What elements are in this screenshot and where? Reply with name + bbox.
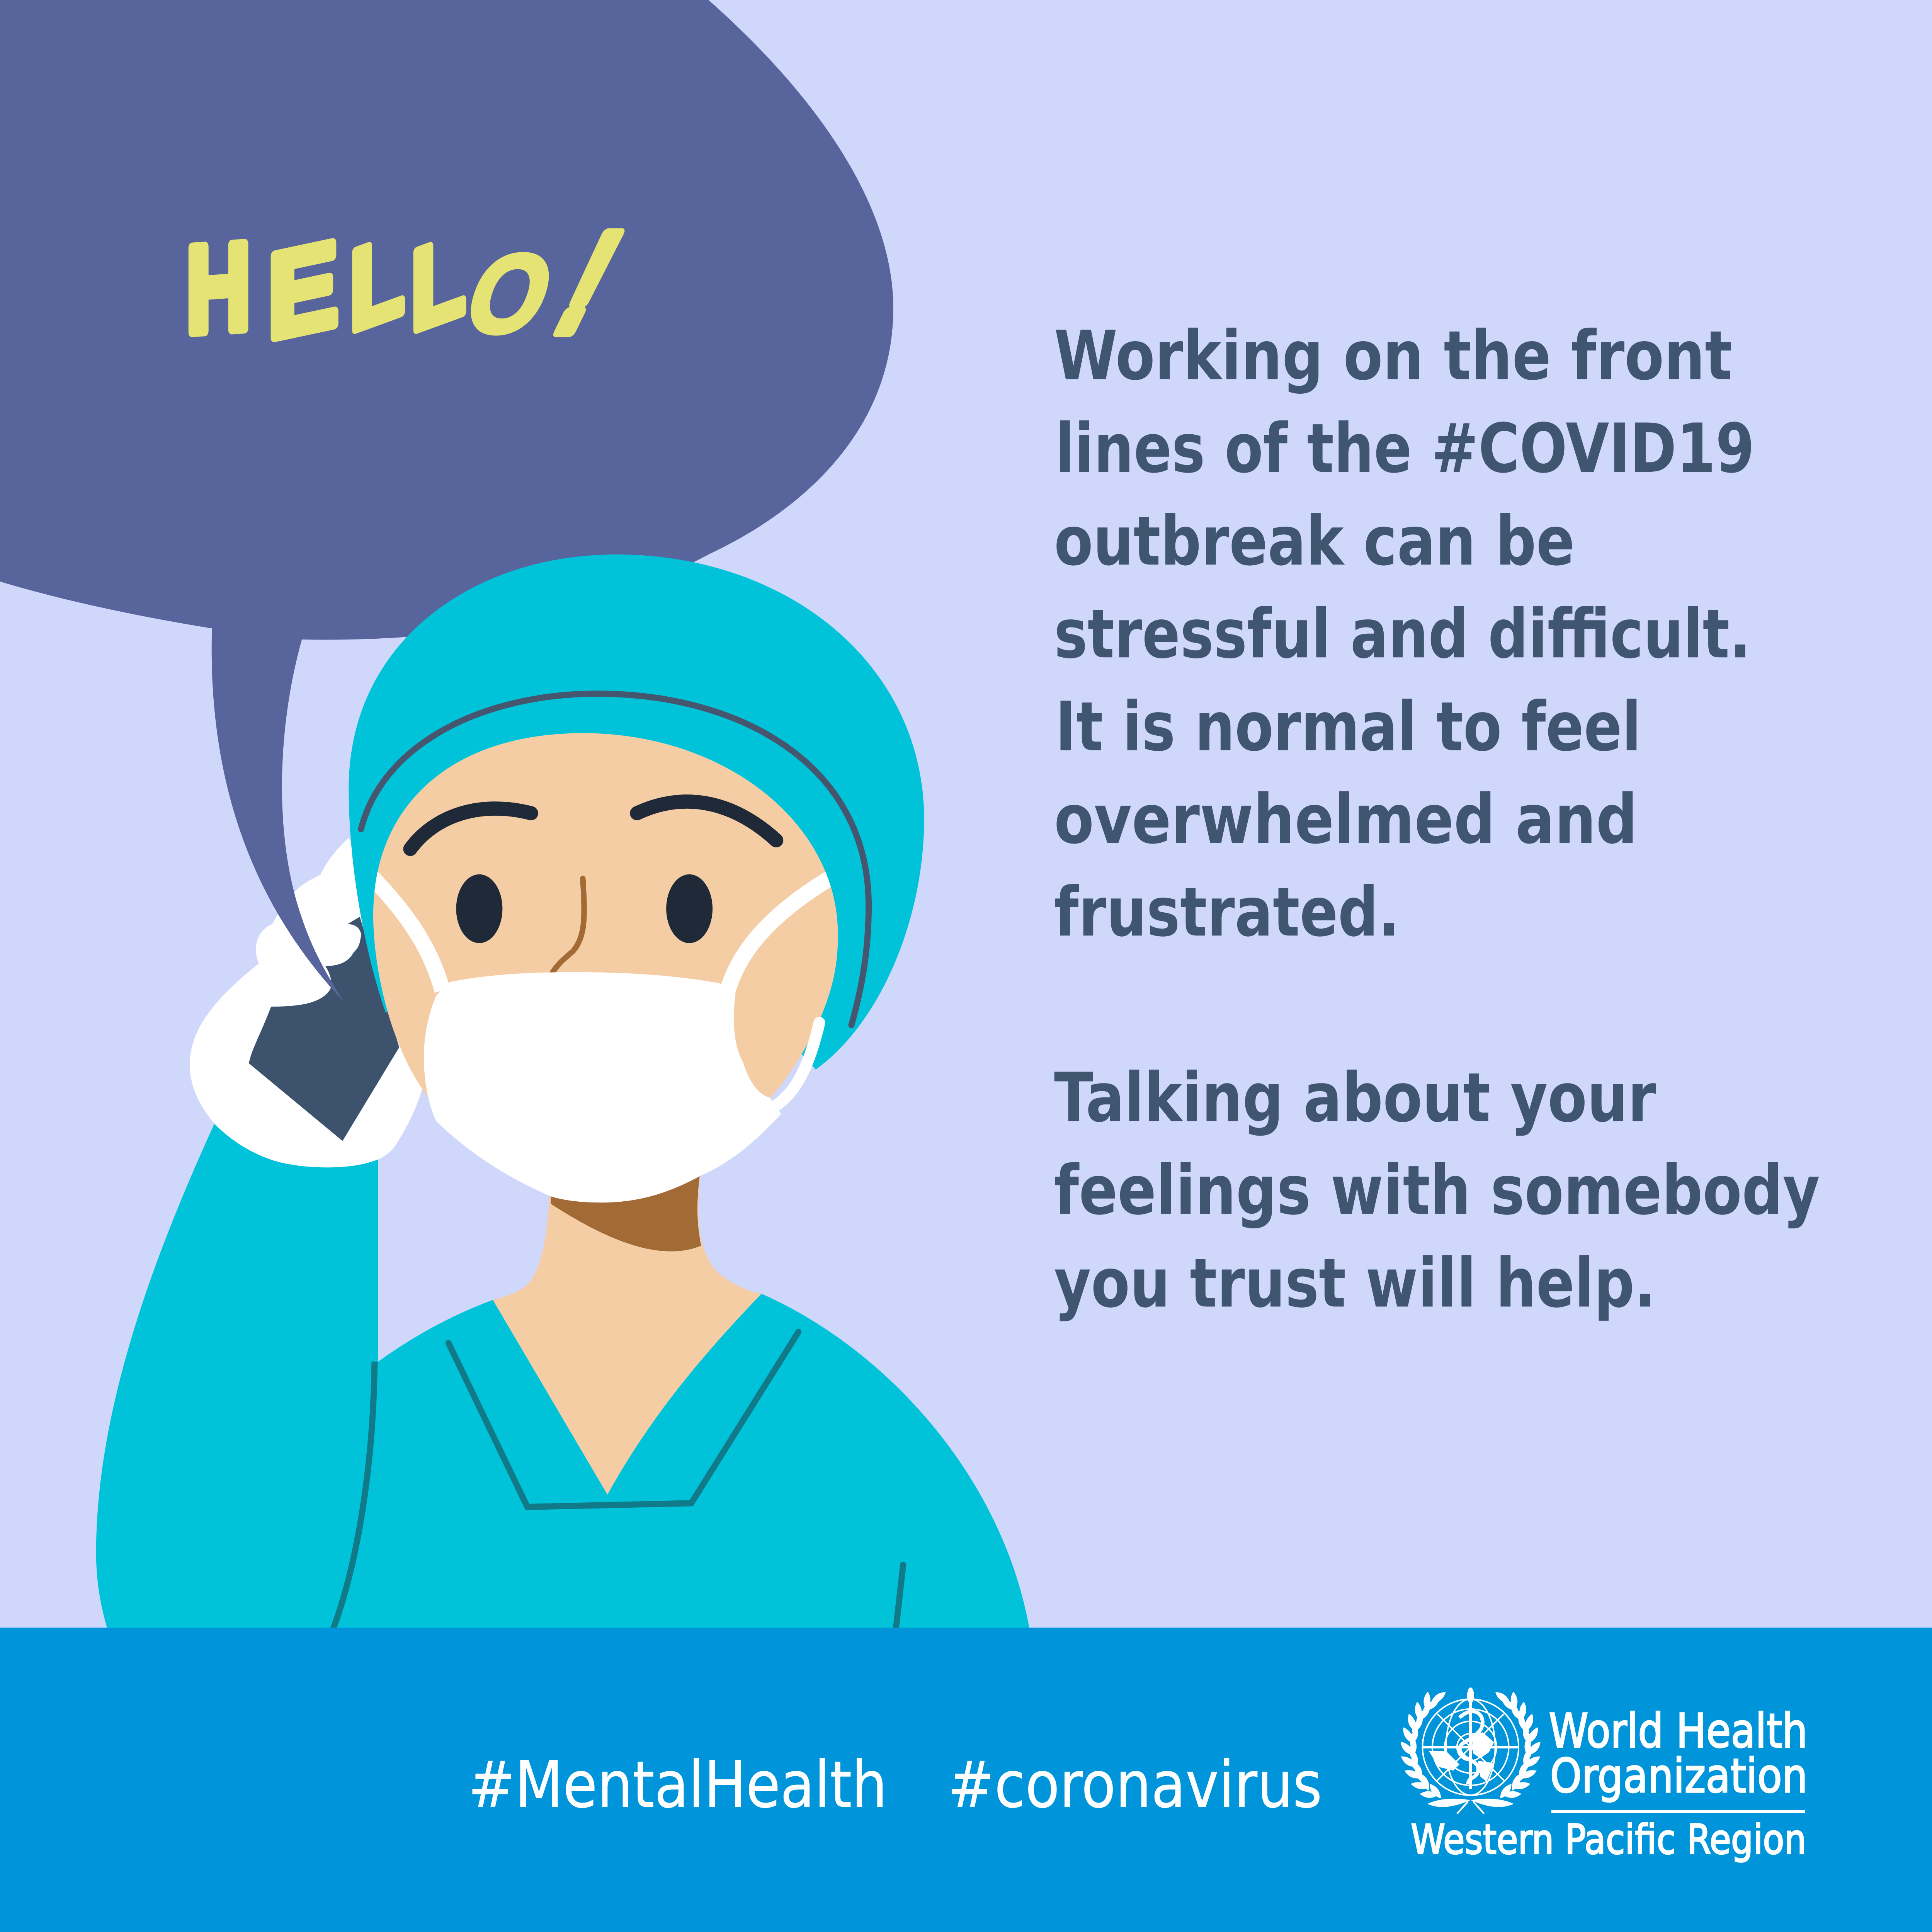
face bbox=[373, 733, 838, 1098]
message text: frustrated. bbox=[1054, 873, 1400, 952]
glove holding phone bbox=[190, 838, 425, 1167]
hello greeting: L bbox=[411, 209, 465, 356]
message text bbox=[1054, 316, 1820, 1323]
hello greeting bbox=[186, 204, 644, 364]
hello greeting: O bbox=[452, 231, 568, 356]
WHO wordmark bbox=[1411, 1704, 1808, 1863]
WHO wordmark: World Health bbox=[1549, 1704, 1808, 1759]
message text: Talking about your bbox=[1054, 1058, 1656, 1137]
hashtags: #MentalHealth bbox=[468, 1748, 887, 1822]
WHO emblem bbox=[1398, 1687, 1543, 1814]
message text: Working on the front bbox=[1054, 316, 1732, 395]
message text: lines of the #COVID19 bbox=[1055, 409, 1755, 488]
message text: overwhelmed and bbox=[1054, 780, 1638, 859]
nose bbox=[552, 879, 584, 973]
hashtags bbox=[468, 1748, 1322, 1822]
surgical cap bbox=[349, 554, 924, 1070]
glove fingers bbox=[261, 906, 361, 1007]
mask straps bbox=[367, 870, 844, 1105]
message text: you trust will help. bbox=[1054, 1244, 1656, 1323]
WHO wordmark: Organization bbox=[1550, 1749, 1808, 1803]
cap band bbox=[361, 694, 869, 1025]
hello greeting: H bbox=[186, 217, 251, 359]
scrubs body and raised arm bbox=[96, 1124, 1030, 1633]
hello greeting: ! bbox=[534, 204, 644, 362]
eyes bbox=[456, 874, 713, 943]
message text: outbreak can be bbox=[1054, 502, 1575, 581]
WHO logo bbox=[1398, 1687, 1808, 1863]
hello greeting: L bbox=[350, 209, 404, 356]
face mask bbox=[424, 972, 781, 1202]
illustration: health worker on the phone bbox=[0, 0, 1030, 1633]
message text: It is normal to feel bbox=[1055, 687, 1641, 766]
speech bubble bbox=[0, 0, 893, 1002]
hello greeting: E bbox=[268, 216, 338, 364]
footer band bbox=[0, 1628, 1932, 1932]
neck bbox=[493, 1164, 762, 1495]
WHO wordmark: Western Pacific Region bbox=[1411, 1816, 1806, 1863]
message text: stressful and difficult. bbox=[1054, 595, 1751, 673]
eyebrows bbox=[410, 802, 776, 849]
hashtags: #coronavirus bbox=[947, 1748, 1322, 1822]
phone bbox=[249, 917, 399, 1141]
